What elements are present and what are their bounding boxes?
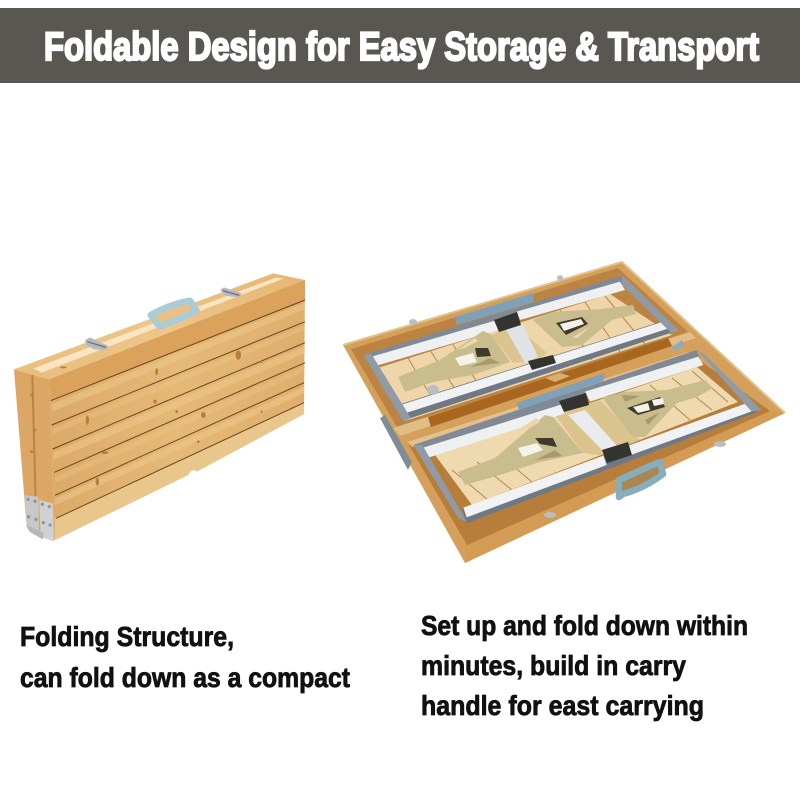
caption left: Folding Structure, — [20, 621, 234, 652]
latch left — [85, 337, 108, 350]
notch in bottom edge — [188, 470, 200, 483]
caption right: minutes, build in carry — [421, 650, 686, 681]
caption right: handle for east carrying — [421, 690, 704, 721]
lower metal rails — [413, 350, 762, 523]
wood outer frame — [343, 262, 785, 563]
side hinge — [380, 415, 412, 470]
caption left: can fold down as a compact — [20, 662, 350, 693]
lower slats — [435, 367, 738, 505]
centre struts upper — [492, 323, 547, 363]
blue hinge upper — [455, 293, 534, 325]
metal bracket — [25, 495, 54, 542]
front planks — [49, 280, 305, 540]
caption right — [421, 610, 748, 721]
lower tray cavity — [407, 352, 770, 545]
upper slats — [378, 294, 672, 421]
upper tray cavity — [351, 268, 688, 427]
beige leg plate lower left — [458, 415, 583, 485]
black clamp blocks — [494, 312, 632, 463]
handle — [151, 301, 197, 327]
centre wooden strip — [393, 332, 696, 436]
caption right: Set up and fold down within — [421, 610, 748, 641]
title banner — [0, 8, 800, 83]
photo: opened table case with folded legs — [343, 262, 785, 563]
latches and cup — [409, 275, 726, 518]
wood knots — [30, 350, 263, 486]
beige leg plate upper right — [533, 305, 636, 347]
blue hinge lower — [517, 373, 605, 410]
handle open — [619, 462, 663, 497]
photo: folded wooden table case — [14, 273, 305, 542]
top edge of case — [14, 273, 305, 379]
caption left — [20, 621, 350, 693]
upper metal rails — [363, 276, 678, 422]
beige leg plate upper left — [398, 331, 510, 392]
left end of case — [14, 369, 55, 540]
centre struts lower — [555, 400, 640, 455]
beige leg plate lower right — [602, 380, 713, 437]
latch right — [220, 287, 242, 297]
